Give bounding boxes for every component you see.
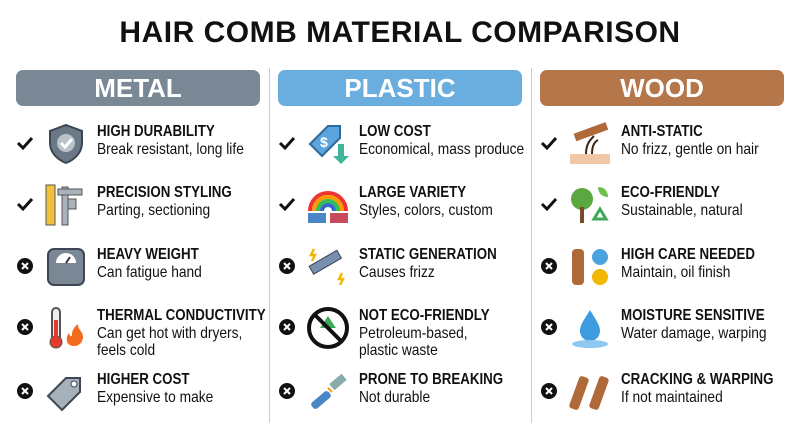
heading: plastic: PLASTIC <box>344 73 456 103</box>
item: eco-friendly: ECO-FRIENDLY <box>621 184 720 201</box>
item: not eco-friendly: plastic waste <box>359 342 438 359</box>
item: moisture sensitive: MOISTURE SENSITIVE <box>621 307 765 324</box>
item: high durability: HIGH DURABILITY <box>97 123 215 140</box>
item: precision styling: PRECISION STYLING <box>97 184 232 201</box>
item: not eco-friendly: Petroleum-based, <box>359 325 468 342</box>
item: anti-static: ANTI-STATIC <box>621 123 703 140</box>
panel: metal <box>16 70 266 412</box>
item: high care needed: Maintain, oil finish <box>621 264 730 281</box>
item: thermal conductivity <box>17 307 266 359</box>
item: large variety: LARGE VARIETY <box>359 184 466 201</box>
heading: metal: METAL <box>94 73 182 103</box>
item: heavy weight <box>17 246 202 286</box>
item: static generation: Causes frizz <box>359 264 435 281</box>
item: low cost: LOW COST <box>359 123 431 140</box>
item: higher cost: HIGHER COST <box>97 371 190 388</box>
item: low cost <box>279 123 524 164</box>
item: anti-static <box>541 122 759 164</box>
item: not eco-friendly: NOT ECO-FRIENDLY <box>359 307 490 324</box>
item: thermal conductivity: Can get hot with dryers, <box>97 325 242 342</box>
item: cracking & warping <box>541 371 774 410</box>
panel: wood <box>540 70 784 410</box>
item: large variety <box>279 184 493 223</box>
item: higher cost <box>17 371 213 412</box>
item: moisture sensitive: Water damage, warping <box>621 325 767 342</box>
item: low cost: $ <box>320 134 328 150</box>
title: HAIR COMB MATERIAL COMPARISON <box>119 16 681 49</box>
item: cracking & warping: CRACKING & WARPING <box>621 371 774 388</box>
item: moisture sensitive <box>541 307 767 348</box>
item: eco-friendly: Sustainable, natural <box>621 202 743 219</box>
item: static generation: STATIC GENERATION <box>359 246 497 263</box>
item: thermal conductivity: THERMAL CONDUCTIVITY <box>97 307 266 324</box>
item: precision styling: Parting, sectioning <box>97 202 210 219</box>
item: prone to breaking <box>279 371 503 409</box>
heading: wood: WOOD <box>620 73 704 103</box>
item: thermal conductivity: feels cold <box>97 342 155 359</box>
item: heavy weight: Can fatigue hand <box>97 264 202 281</box>
item: precision styling <box>17 184 232 226</box>
item: heavy weight: HEAVY WEIGHT <box>97 246 199 263</box>
item: prone to breaking: PRONE TO BREAKING <box>359 371 503 388</box>
item: low cost: Economical, mass produce <box>359 141 524 158</box>
item: high care needed <box>541 246 755 285</box>
item: large variety: Styles, colors, custom <box>359 202 493 219</box>
item: not eco-friendly <box>279 307 490 359</box>
heading: wood <box>540 70 784 106</box>
item: eco-friendly <box>541 184 743 223</box>
heading: plastic <box>278 70 522 106</box>
heading: metal <box>16 70 260 106</box>
item: high care needed: HIGH CARE NEEDED <box>621 246 755 263</box>
item: high durability: Break resistant, long life <box>97 141 244 158</box>
item: static generation <box>279 246 497 286</box>
item: cracking & warping: If not maintained <box>621 389 723 406</box>
panel: plastic <box>278 70 524 409</box>
item: high durability <box>17 123 244 164</box>
item: higher cost: Expensive to make <box>97 389 213 406</box>
item: prone to breaking: Not durable <box>359 389 430 406</box>
item: anti-static: No frizz, gentle on hair <box>621 141 759 158</box>
